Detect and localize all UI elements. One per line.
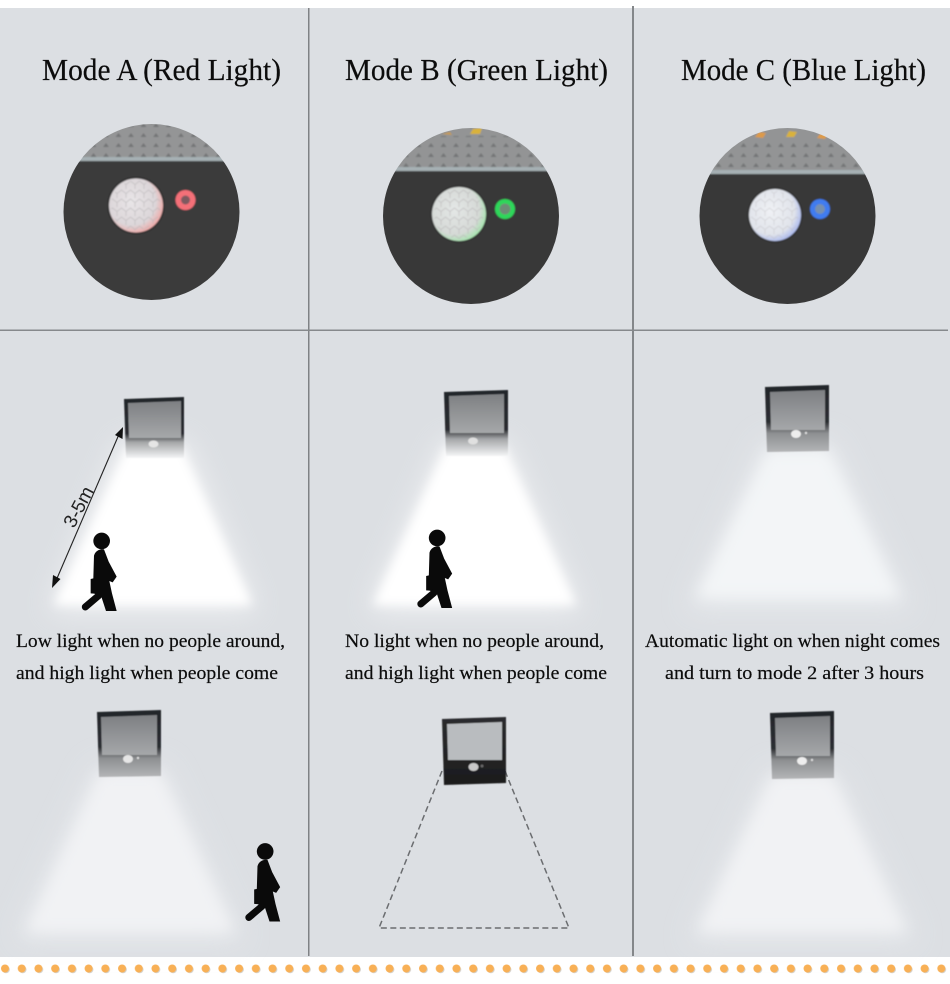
caption: Mode A: and high light when people come: [16, 663, 278, 684]
caption: Mode C: Automatic light on when night comes: [645, 631, 940, 652]
distance label: 3-5m: [60, 483, 99, 531]
scene: Mode A with person far: [14, 710, 280, 942]
scene: Mode B with no person: [379, 717, 569, 928]
caption: Mode C: and turn to mode 2 after 3 hours: [665, 663, 924, 684]
lamp: [765, 385, 829, 452]
photo: green indicator sensor: [383, 128, 559, 304]
dashed detection zone: [379, 771, 569, 928]
caption: Mode B: No light when no people around,: [345, 631, 604, 652]
title: Mode C: Mode C (Blue Light): [681, 52, 926, 87]
caption: Mode B: and high light when people come: [345, 663, 607, 684]
caption: Mode A: [16, 631, 285, 684]
title: Mode B: Mode B (Green Light): [345, 52, 608, 87]
light beam: [26, 772, 234, 932]
light halo: [14, 765, 245, 942]
person walking: [85, 533, 117, 611]
person walking: [421, 530, 452, 608]
title: Mode A: Mode A (Red Light): [42, 52, 281, 87]
photo: blue indicator sensor: [700, 128, 876, 304]
light beam: [696, 450, 900, 598]
scene: Mode B with person near: [368, 390, 582, 612]
light halo: [368, 440, 582, 612]
orange dot border: [0, 960, 950, 980]
light halo: [48, 440, 258, 612]
photo: red indicator sensor: [64, 124, 240, 300]
light beam: [54, 448, 252, 605]
lamp: [770, 711, 834, 779]
lamp: [442, 717, 506, 785]
caption: Mode A: Low light when no people around,: [16, 631, 285, 652]
person walking: [249, 843, 280, 921]
caption: Mode B: [345, 631, 607, 684]
caption: Mode C: [645, 631, 940, 684]
lamp: [124, 397, 184, 458]
lamp: [97, 710, 161, 777]
light halo: [686, 440, 912, 610]
distance arrow: [52, 427, 123, 588]
scene: Mode C night light: [686, 385, 912, 610]
light beam: [698, 776, 906, 932]
light halo: [688, 770, 918, 942]
scene: Mode C after three hours: [688, 711, 918, 942]
lamp: [444, 390, 508, 456]
scene: Mode A with person near: [48, 397, 258, 612]
light beam: [373, 446, 576, 605]
